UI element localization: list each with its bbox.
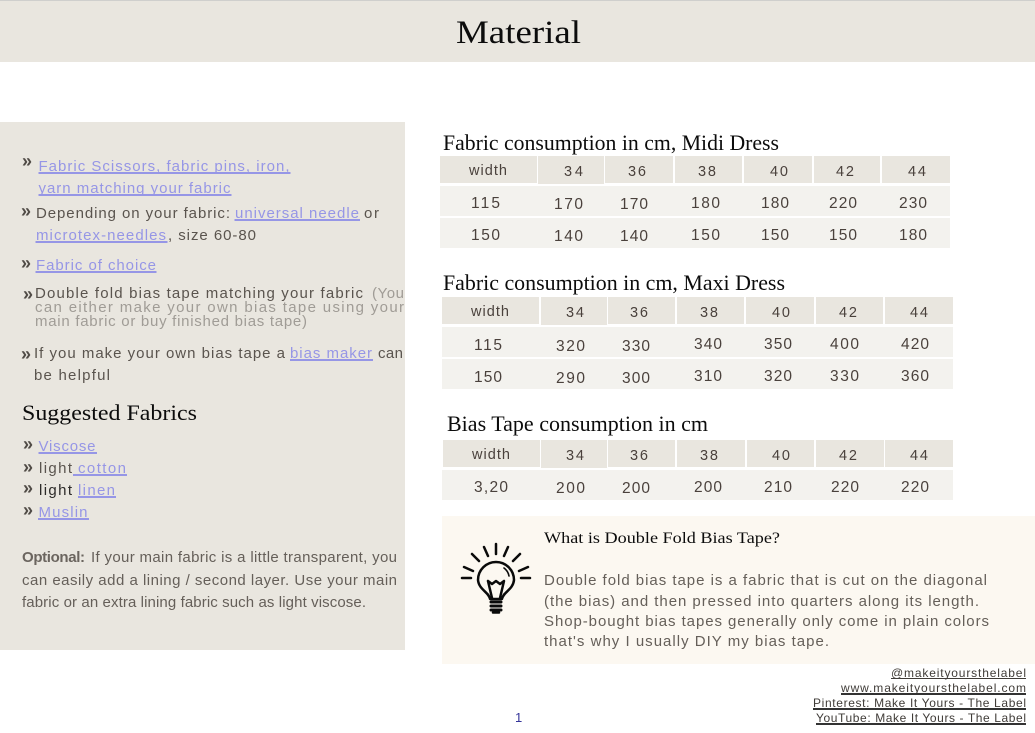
table: midi dress: 36 bbox=[628, 164, 646, 180]
callout body text: Double fold bias tape is a fabric that is cut on the diagonal bbox=[544, 572, 987, 589]
list: suggested fabrics: Muslin bbox=[38, 504, 88, 521]
icon: light bulb bbox=[462, 544, 530, 612]
table: maxi dress: 360 bbox=[901, 368, 929, 385]
item: bias tape: » bbox=[23, 284, 33, 304]
table: bias tape: 38 bbox=[700, 448, 718, 464]
table: bias tape: 40 bbox=[772, 448, 790, 464]
table: bias tape: 42 bbox=[839, 448, 857, 464]
table: bias tape: 200 bbox=[556, 480, 585, 497]
item: bias maker: If you make your own bias tape a bbox=[34, 345, 286, 362]
footer links: YouTube: Make It Yours - The Label bbox=[816, 711, 1026, 725]
table: maxi dress: 340 bbox=[694, 336, 722, 353]
heading: suggested fabrics: Suggested Fabrics bbox=[22, 400, 197, 425]
table: midi dress: 150 bbox=[691, 227, 720, 244]
heading: maxi dress: Fabric consumption in cm, Maxi Dress bbox=[443, 270, 785, 295]
table: maxi dress: 34 bbox=[566, 305, 584, 321]
table: maxi dress: 42 bbox=[839, 305, 857, 321]
item: scissors and pins: Fabric Scissors, fabric pins, iron, bbox=[38, 158, 290, 175]
table: midi dress: 180 bbox=[761, 195, 789, 212]
list: suggested fabrics: cotton bbox=[78, 460, 126, 477]
panel: materials list bbox=[0, 122, 405, 650]
table: maxi dress: 44 bbox=[910, 305, 928, 321]
list: suggested fabrics bbox=[23, 434, 127, 521]
table: maxi dress: 350 bbox=[764, 336, 792, 353]
item: needles: , size 60-80 bbox=[168, 227, 256, 244]
callout heading: What is Double Fold Bias Tape? bbox=[544, 530, 780, 547]
table: midi dress: 40 bbox=[770, 164, 788, 180]
table: bias tape: 3,20 bbox=[474, 479, 508, 496]
table: midi dress: 180 bbox=[899, 227, 927, 244]
item: needles bbox=[21, 201, 379, 244]
list: suggested fabrics: linen bbox=[78, 482, 115, 499]
table: maxi dress: 40 bbox=[772, 305, 790, 321]
footer links: www.makeityoursthelabel.com bbox=[840, 681, 1026, 695]
callout: double fold bias tape bbox=[442, 516, 1035, 664]
item: bias tape: Double fold bias tape matching your fabric bbox=[35, 285, 363, 302]
table: midi dress: 42 bbox=[836, 164, 854, 180]
item: needles: Depending on your fabric: bbox=[36, 205, 230, 222]
table: midi dress: 220 bbox=[829, 195, 857, 212]
table: midi dress: 150 bbox=[471, 227, 500, 244]
table: midi dress: 230 bbox=[899, 195, 927, 212]
table: maxi dress: width bbox=[470, 304, 509, 320]
item: scissors and pins: yarn matching your fabric bbox=[38, 180, 231, 197]
list: suggested fabrics: » bbox=[23, 478, 33, 498]
table: bias tape: 34 bbox=[566, 448, 584, 464]
table: bias tape bbox=[442, 440, 953, 500]
table: bias tape: 220 bbox=[901, 479, 929, 496]
item: bias tape bbox=[23, 284, 404, 330]
title: Material bbox=[456, 15, 581, 51]
list: suggested fabrics: Viscose bbox=[38, 438, 96, 455]
item: bias maker: be helpful bbox=[34, 367, 110, 384]
table: midi dress: 115 bbox=[471, 195, 500, 212]
heading: bias tape: Bias Tape consumption in cm bbox=[447, 411, 708, 436]
item: scissors and pins: » bbox=[22, 151, 32, 171]
table: maxi dress: 36 bbox=[630, 305, 648, 321]
item: needles: microtex-needles bbox=[36, 227, 166, 244]
table: maxi dress: 300 bbox=[622, 370, 650, 387]
list: suggested fabrics: » bbox=[23, 434, 33, 454]
item: fabric of choice: Fabric of choice bbox=[36, 257, 156, 274]
footer links bbox=[813, 666, 1026, 725]
table: maxi dress: 150 bbox=[474, 369, 502, 386]
table: midi dress: 140 bbox=[620, 228, 648, 245]
table: maxi dress bbox=[442, 297, 953, 389]
callout body text bbox=[544, 572, 989, 650]
item: bias tape: can either make your own bias tape using your bbox=[35, 299, 404, 316]
page number: 1 bbox=[515, 710, 522, 725]
item: bias maker: can bbox=[378, 345, 403, 362]
table: maxi dress: 330 bbox=[622, 338, 650, 355]
table: maxi dress: 320 bbox=[556, 338, 585, 355]
table: bias tape: 210 bbox=[764, 479, 792, 496]
table: bias tape: 200 bbox=[622, 480, 650, 497]
table: midi dress: 150 bbox=[829, 227, 857, 244]
item: fabric of choice: » bbox=[21, 253, 31, 273]
text block: optional lining note bbox=[22, 549, 397, 611]
table: bias tape: 44 bbox=[910, 448, 928, 464]
text block: optional lining note: fabric or an extra lining fabric such as light viscose. bbox=[22, 594, 366, 611]
table: midi dress: 180 bbox=[691, 195, 720, 212]
table: maxi dress: 310 bbox=[694, 368, 722, 385]
table: bias tape: 220 bbox=[831, 479, 859, 496]
table: maxi dress: 400 bbox=[830, 336, 859, 353]
list: suggested fabrics: light bbox=[39, 482, 73, 499]
table: maxi dress: 115 bbox=[474, 337, 502, 354]
table: maxi dress: 420 bbox=[901, 336, 929, 353]
item: bias maker bbox=[21, 344, 403, 384]
table: maxi dress: 290 bbox=[556, 370, 585, 387]
item: bias tape: main fabric or buy finished bias tape) bbox=[35, 313, 307, 330]
table: maxi dress: 320 bbox=[764, 368, 792, 385]
table: bias tape: 36 bbox=[630, 448, 648, 464]
callout body text: (the bias) and then pressed into quarters along its length. bbox=[544, 593, 979, 610]
item: bias maker: bias maker bbox=[290, 345, 372, 362]
table: midi dress: 34 bbox=[564, 164, 583, 180]
header band bbox=[0, 0, 1035, 62]
table: midi dress: 150 bbox=[761, 227, 789, 244]
table: midi dress: 170 bbox=[620, 196, 648, 213]
item: scissors and pins bbox=[22, 151, 290, 197]
callout body text: Shop-bought bias tapes generally only come in plain colors bbox=[544, 613, 989, 630]
list: suggested fabrics: » bbox=[23, 457, 33, 477]
table: midi dress: width bbox=[468, 163, 507, 179]
table: midi dress: 44 bbox=[908, 164, 926, 180]
table: maxi dress: 330 bbox=[830, 368, 859, 385]
callout body text: that's why I usually DIY my bias tape. bbox=[544, 633, 829, 650]
item: needles: » bbox=[21, 201, 31, 221]
text block: optional lining note: can easily add a lining / second layer. Use your main bbox=[22, 572, 397, 589]
table: bias tape: 200 bbox=[694, 479, 722, 496]
item: bias maker: » bbox=[21, 344, 31, 364]
table: bias tape: width bbox=[471, 447, 510, 463]
table: midi dress: 38 bbox=[698, 164, 716, 180]
text block: optional lining note: If your main fabric is a little transparent, you bbox=[91, 549, 397, 566]
text block: optional lining note: Optional: bbox=[22, 549, 85, 566]
item: needles: or bbox=[364, 205, 379, 222]
table: maxi dress: 38 bbox=[700, 305, 718, 321]
item: bias tape: (You bbox=[372, 285, 404, 302]
list: suggested fabrics: » bbox=[23, 500, 33, 520]
footer links: @makeityoursthelabel bbox=[891, 666, 1026, 680]
footer links: Pinterest: Make It Yours - The Label bbox=[813, 696, 1026, 710]
list: suggested fabrics: light bbox=[39, 460, 73, 477]
table: midi dress: 170 bbox=[554, 196, 583, 213]
item: needles: universal needle bbox=[235, 205, 359, 222]
table: midi dress bbox=[440, 156, 950, 248]
heading: midi dress: Fabric consumption in cm, Midi Dress bbox=[443, 130, 779, 155]
table: midi dress: 140 bbox=[554, 228, 583, 245]
